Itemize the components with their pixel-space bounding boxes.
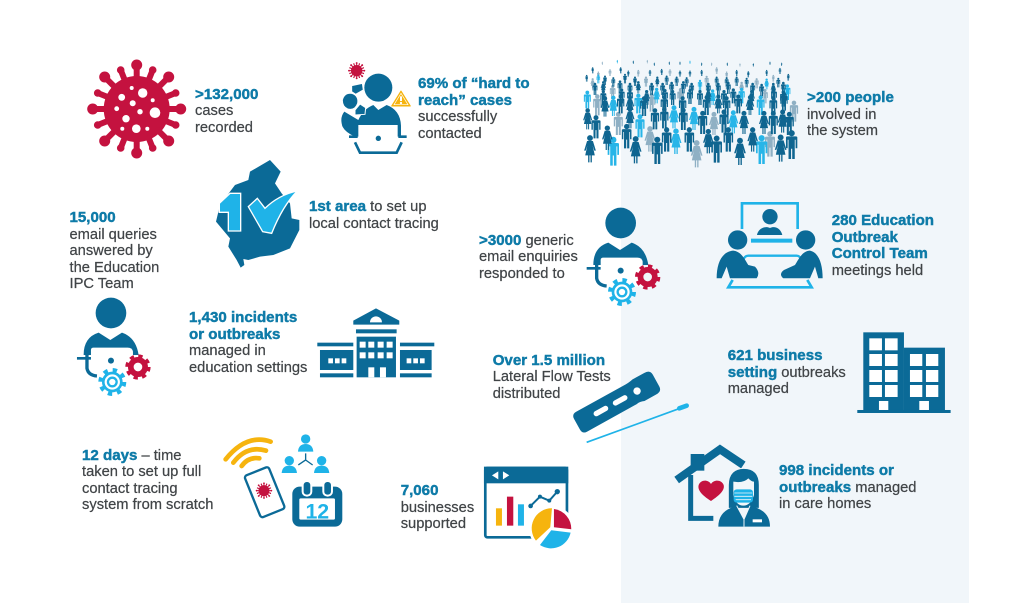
- text: email queries: IPC Team: [70, 276, 134, 292]
- icon: region map with 1 and check mark: [216, 160, 299, 268]
- text: lateral flow tests: Lateral Flow Tests: [493, 369, 611, 385]
- text: outbreak control meetings: Control Team: [832, 245, 928, 262]
- icon: school building: [317, 308, 434, 377]
- text: hard to reach cases: reach” cases: [418, 92, 512, 109]
- text: hard to reach cases: [418, 75, 530, 142]
- text: businesses supported: [401, 482, 474, 532]
- text: first area: [309, 198, 439, 232]
- text: education incidents: education settings: [189, 360, 307, 376]
- text: education incidents: or outbreaks: [189, 326, 280, 343]
- text: cases recorded: recorded: [195, 120, 253, 136]
- icon: red virus: [87, 60, 186, 158]
- text: care homes: 998 incidents or: [779, 462, 894, 479]
- text: email queries: 15,000: [70, 209, 116, 226]
- text: business outbreaks: [728, 347, 846, 397]
- text: twelve days: [82, 447, 213, 513]
- text: cases recorded: [195, 86, 258, 136]
- text: education incidents: [189, 309, 307, 376]
- text: twelve days: taken to set up full: [82, 464, 201, 480]
- text: people involved: >200 people: [807, 89, 894, 106]
- text: care homes: outbreaks managed: [779, 479, 916, 496]
- text: email queries: email queries: [70, 227, 157, 243]
- icon: person on laptop with virus and warning: [341, 62, 410, 153]
- text: generic email enquiries: >3000 generic: [479, 232, 574, 249]
- text: outbreak control meetings: 280 Education: [832, 212, 934, 229]
- text: businesses supported: 7,060: [401, 482, 438, 499]
- text: businesses supported: supported: [401, 516, 466, 532]
- text: business outbreaks: managed: [728, 381, 789, 397]
- text: education incidents: 1,430 incidents: [189, 309, 297, 326]
- text: cases recorded: >132,000: [195, 86, 258, 103]
- text: twelve days: contact tracing: [82, 481, 178, 497]
- icon: contact tracing phone, wifi, network and calendar: 12: [305, 500, 329, 524]
- text: lateral flow tests: [493, 352, 611, 402]
- text: care homes: in care homes: [779, 496, 871, 512]
- text: twelve days: 12 days – time: [82, 447, 181, 464]
- text: lateral flow tests: distributed: [493, 386, 560, 402]
- text: cases recorded: cases: [195, 103, 233, 119]
- text: education incidents: managed in: [189, 343, 266, 359]
- text: outbreak control meetings: [832, 212, 934, 279]
- text: lateral flow tests: Over 1.5 million: [493, 352, 605, 369]
- text: email queries: the Education: [70, 260, 159, 276]
- icon: contact tracing phone, wifi, network and calendar: [226, 434, 342, 527]
- text: hard to reach cases: 69% of “hard to: [418, 75, 530, 92]
- text: hard to reach cases: contacted: [418, 126, 482, 142]
- icon: care home with nurse: [677, 449, 770, 527]
- text: hard to reach cases: successfully: [418, 109, 497, 125]
- text: outbreak control meetings: meetings held: [832, 263, 923, 279]
- icon: office worker with gears (upper): [587, 208, 659, 304]
- icon: video meeting: [717, 203, 823, 287]
- text: first area: local contact tracing: [309, 216, 439, 232]
- text: outbreak control meetings: Outbreak: [832, 229, 898, 246]
- text: care homes: [779, 462, 916, 512]
- panel: shaded right background: [621, 0, 969, 603]
- icon: office worker with gears (lower): [77, 298, 149, 394]
- text: people involved: involved in: [807, 107, 876, 123]
- text: business outbreaks: setting outbreaks: [728, 364, 846, 381]
- icon: dashboard with charts: [484, 467, 574, 551]
- text: people involved: [807, 89, 894, 139]
- text: generic email enquiries: [479, 232, 578, 282]
- text: generic email enquiries: responded to: [479, 266, 565, 282]
- text: email queries: [70, 209, 159, 292]
- text: email queries: answered by: [70, 243, 153, 259]
- text: generic email enquiries: email enquiries: [479, 249, 578, 265]
- icon: office buildings: [857, 332, 951, 413]
- text: first area: 1st area to set up: [309, 198, 426, 215]
- text: twelve days: system from scratch: [82, 497, 213, 513]
- icon: lateral flow test and swab: [571, 370, 687, 442]
- icon: crowd of people: [583, 60, 798, 167]
- text: people involved: the system: [807, 123, 878, 139]
- text: businesses supported: businesses: [401, 500, 474, 516]
- text: business outbreaks: 621 business: [728, 347, 822, 364]
